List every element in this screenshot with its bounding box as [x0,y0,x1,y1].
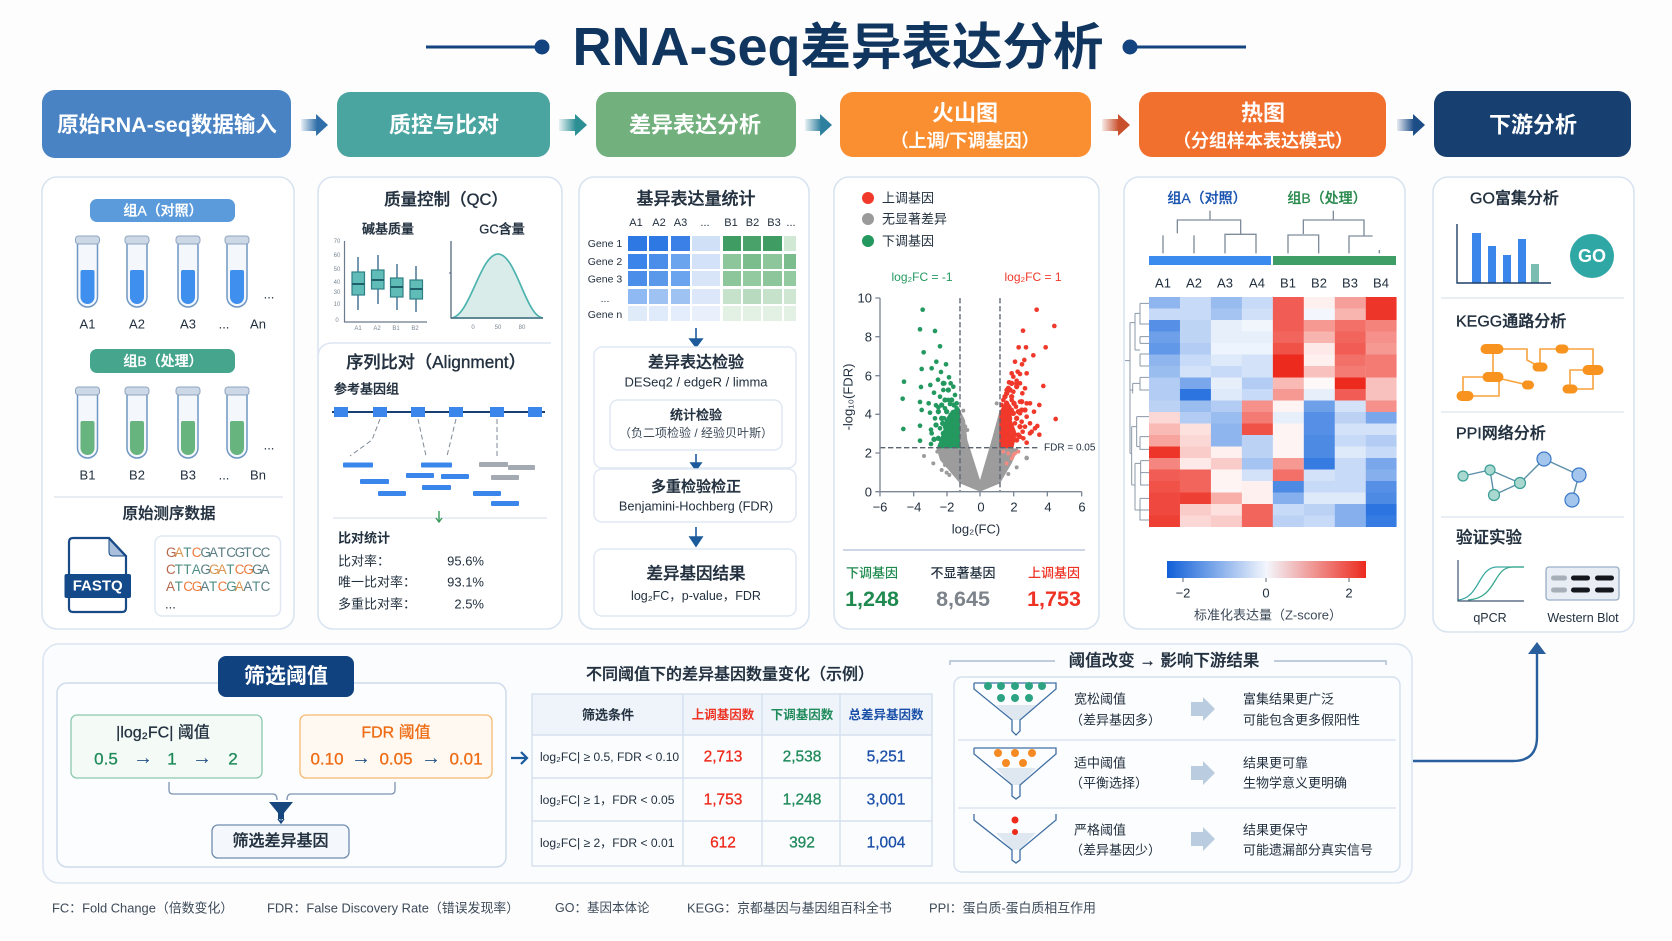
down stat: 1,248 [845,587,899,611]
column labels: A1 [1155,276,1171,290]
title: RNA-seq差异表达分析 [572,17,1104,77]
sequence reads box: ... [165,596,176,612]
arrow 5 [1397,114,1425,136]
legend: 无显著差异 [882,212,947,226]
up stat: 1,753 [1027,587,1081,611]
x axis title: log₂(FC) [952,522,1000,536]
column labels: ... [786,217,796,229]
y axis labels: 6 [865,368,872,384]
PPI network [1458,452,1586,507]
log2FC threshold box: 0.5 [94,750,118,768]
comparison table: 5,251 [867,748,905,766]
comparison table: 1,248 [783,792,821,808]
step 6 header: 下游分析 [1489,112,1577,138]
stats test box: （负二项检验 / 经验贝叶斯） [619,425,773,440]
multiple testing box [594,469,796,522]
boxplot tick labels: 50 [334,267,341,273]
comparison table: 上调基因数 [692,707,755,722]
x axis labels: 4 [1044,500,1052,514]
log2FC threshold box: → [192,747,212,769]
log2FC threshold box [71,715,262,778]
threshold badge: 筛选阈值 [244,665,328,688]
boxplot tick labels: 60 [334,253,341,259]
group A labels [80,286,274,332]
step 3 header [596,92,796,157]
KEGG pathway [1456,344,1604,401]
comparison table: log₂FC| ≥ 2，FDR < 0.01 [540,836,675,850]
boxplot tick labels: 70 [334,239,341,245]
arrow 3 [805,114,832,136]
group A labels: A2 [129,316,145,332]
row labels [588,238,622,321]
DE test box: DESeq2 / edgeR / limma [624,374,768,390]
step 2 header [337,92,550,157]
impact box [954,677,1400,872]
footer glossary [52,900,1096,916]
group A pill [90,199,235,222]
x axis labels [873,500,1086,514]
DE test box [594,347,796,468]
column labels [629,217,796,229]
alignment stats: 多重比对率： [338,596,416,612]
icon: GO badge [1570,234,1614,278]
column labels: ... [700,217,710,229]
legend: 上调基因 [882,190,934,206]
FDR threshold box [300,715,492,778]
comparison table: 1,753 [704,792,742,808]
group titles [1167,190,1367,206]
validation labels: qPCR [1473,611,1507,625]
step 5 header: 热图 [1241,100,1285,126]
colour scale [1167,561,1366,622]
medium outcome: 生物学意义更明确 [1243,776,1347,790]
panel: heatmap [1124,177,1405,629]
panel: volcano plot [834,177,1099,629]
GC curve [449,241,543,318]
footer glossary: FC：Fold Change（倍数变化） [52,900,233,916]
PPI heading: PPI网络分析 [1456,424,1546,442]
column labels: B3 [1342,276,1358,290]
step 1 header: 原始RNA-seq数据输入 [57,113,277,137]
raw data heading: 原始测序数据 [122,504,216,522]
column labels: B2 [1311,276,1327,290]
GO heading: GO富集分析 [1470,188,1559,208]
footer glossary: PPI：蛋白质-蛋白质相互作用 [929,900,1096,916]
loose text: （差异基因多） [1070,712,1161,728]
icon: GO badge: GO [1578,246,1606,266]
threshold labels: log₂FC = 1 [1004,270,1062,284]
group B labels [80,438,274,482]
column labels [1155,276,1389,290]
y axis labels: 10 [858,290,872,306]
result box: 差异基因结果 [646,564,746,583]
step 5 header: （分组样本表达模式） [1173,131,1353,151]
panel: differential expression [579,177,809,629]
KEGG heading: KEGG通路分析 [1456,312,1566,330]
result box [594,549,796,616]
step 4 header: （上调/下调基因） [890,131,1040,151]
arrow [1191,697,1215,721]
qPCR chart [1458,560,1524,601]
legend: 下调基因 [882,234,934,248]
row labels: Gene 1 [588,238,622,250]
y axis labels [858,290,872,500]
neutral stat: 不显著基因 [930,566,996,580]
medium text [1070,756,1148,790]
column labels: B4 [1373,276,1389,290]
step 4 header [840,92,1091,157]
column labels: A4 [1249,276,1265,290]
panel: threshold section [43,644,1412,883]
FDR threshold box: 0.05 [379,750,413,768]
group A labels: ... [219,316,229,332]
table title: 不同阈值下的差异基因数量变化（示例） [586,664,874,684]
FDR threshold box: FDR 阈值 [361,724,431,742]
QC heading: 质量控制（QC） [384,190,508,209]
group A tubes [76,236,249,307]
sequence reads box: ATCGATCGAATC [166,578,271,594]
loose text [1070,692,1161,728]
stats test box: 统计检验 [670,408,722,422]
boxplot tick labels: 0 [335,318,339,324]
GC tick labels: 0 [471,325,475,331]
arrow to downstream [1413,642,1546,761]
group B pill: 组B（处理） [123,353,203,369]
validation heading: 验证实验 [1456,527,1522,547]
loose outcome [1243,692,1360,728]
comparison table: 2,538 [783,748,821,766]
log2FC threshold box: → [133,747,153,769]
stats test box [610,400,782,450]
column labels: A3 [674,217,687,229]
step 4 header: 火山图 [932,100,998,126]
log2FC threshold box: 2 [228,750,238,768]
step 1 header [42,90,291,158]
row dendrogram [1125,303,1149,520]
row labels: Gene n [588,309,622,321]
GC tick labels: 80 [519,325,526,331]
step 3 header: 差异表达分析 [629,112,761,138]
loose outcome: 可能包含更多假阳性 [1243,712,1360,728]
group colour bars [1149,256,1396,265]
GC tick labels: 50 [495,325,502,331]
colour scale: 2 [1345,586,1353,600]
group B labels: B1 [80,468,95,482]
funnel medium [974,748,1056,799]
comparison table: 392 [789,834,815,852]
strict text [1070,822,1161,858]
comparison table: 3,001 [867,792,905,808]
expression matrix [628,236,796,321]
threshold inner panel [57,656,506,867]
FDR threshold box: → [351,747,371,769]
colour scale: −2 [1176,586,1190,600]
comparison table: 2,713 [704,748,742,766]
boxplot tick labels: 40 [334,280,341,286]
multiple testing box: 多重检验检正 [651,478,741,496]
row labels: ... [601,293,609,305]
legend [862,190,947,248]
x axis labels: −4 [907,500,921,514]
Western blot [1546,567,1619,600]
GC label: GC含量 [479,222,525,236]
boxplot tick labels: 10 [334,302,341,308]
y axis labels: 4 [865,406,872,422]
group A pill: 组A（对照） [123,202,203,218]
GO bar chart [1457,224,1551,283]
group B pill [90,349,235,373]
down stat: 下调基因 [846,566,898,580]
step 2 header: 质控与比对 [389,112,499,138]
threshold badge [218,656,354,697]
column labels: B1 [724,217,738,229]
panel: raw input [42,177,294,629]
filter result box: 筛选差异基因 [232,831,329,850]
loose outcome: 富集结果更广泛 [1243,692,1334,706]
log2FC threshold box: 1 [167,750,177,768]
volcano scatter [875,298,1082,496]
arrow down [691,454,701,470]
group titles: 组A（对照） [1167,190,1247,206]
strict outcome [1243,822,1373,858]
arrow down [690,328,702,347]
footer glossary: FDR：False Discovery Rate（错误发现率） [267,900,519,916]
comparison table: 总差异基因数 [848,707,924,722]
boxplot tick labels: B1 [392,326,400,332]
filter result box [212,825,349,858]
sequence reads box: GATCGATCGTCC [166,544,271,560]
neutral stat: 8,645 [936,587,990,611]
merge connector [169,782,395,823]
step 5 header [1139,92,1386,157]
y axis title: -log₁₀(FDR) [840,364,856,430]
colour scale: 标准化表达量（Z-score） [1194,608,1342,622]
arrow to table [511,752,527,764]
alignment stats [338,530,484,612]
FDR threshold box: → [421,747,441,769]
aligned reads [343,462,535,506]
alignment stats: 2.5% [454,596,484,612]
group A labels: A3 [180,316,196,332]
boxplot tick labels: B2 [411,326,419,332]
group B labels: ... [219,468,229,482]
arrow [1191,761,1215,785]
comparison table: 612 [710,834,736,852]
column labels: B1 [1280,276,1296,290]
colour scale: 0 [1262,586,1270,600]
multiple testing box: Benjamini-Hochberg (FDR) [619,498,773,514]
x axis labels: 6 [1078,500,1086,514]
group B tubes [76,387,249,458]
strict outcome: 可能遗漏部分真实信号 [1243,842,1373,858]
medium outcome: 结果更可靠 [1243,756,1308,770]
footer glossary: KEGG：京都基因与基因组百科全书 [687,900,892,916]
group A labels: An [250,316,266,332]
boxplot tick labels [334,239,419,332]
row labels: Gene 2 [588,256,622,268]
column dendrogram [1163,211,1379,253]
y axis labels: 0 [865,484,872,500]
arrow 2 [559,114,587,136]
medium text: （平衡选择） [1070,776,1148,790]
column labels: A3 [1217,276,1233,290]
panel: QC and alignment [318,177,562,629]
y axis labels: 2 [865,446,872,460]
group B labels: B2 [129,468,145,482]
group B labels: B3 [180,468,196,482]
heatmap [1149,297,1397,527]
icon: FASTQ file [64,538,131,612]
x axis labels: 0 [977,500,985,514]
comparison table: 筛选条件 [582,708,634,722]
icon: FASTQ file: FASTQ [73,578,123,594]
green down arrow [436,511,442,522]
log2FC threshold box: |log₂FC| 阈值 [116,724,210,742]
group B labels: ... [264,438,274,452]
comparison table: 1,004 [867,834,906,852]
arrow 4 [1102,114,1130,136]
alignment stats: 比对率： [338,554,390,568]
FDR threshold box: 0.01 [449,750,483,768]
group B labels: Bn [250,468,266,482]
medium text: 适中阈值 [1074,756,1126,770]
title [426,17,1246,77]
column labels: A2 [652,217,666,229]
medium outcome [1243,756,1347,790]
x axis labels: 2 [1010,500,1018,514]
boxplot [344,241,427,322]
FDR label: FDR = 0.05 [1044,442,1096,454]
up stat [1027,566,1081,611]
validation labels [1473,611,1619,625]
base quality label: 碱基质量 [362,222,414,236]
GC tick labels [471,325,526,331]
result box: log₂FC，p-value，FDR [631,589,761,603]
comparison table: 下调基因数 [771,707,834,722]
sequence reads box [155,536,280,616]
footer glossary: GO：基因本体论 [555,901,650,915]
arrow [1191,827,1215,851]
strict outcome: 结果更保守 [1243,822,1308,838]
alignment stats: 93.1% [447,574,484,590]
column labels: A2 [1186,276,1202,290]
x axis labels: −2 [940,500,954,514]
boxplot tick labels: A2 [373,326,381,332]
impact heading [950,650,1386,670]
column labels: B3 [767,217,781,229]
threshold labels: log₂FC = -1 [891,270,953,284]
group A labels: A1 [80,316,95,332]
alignment stats: 比对统计 [338,530,390,546]
alignment stats: 95.6% [447,554,484,568]
comparison table: log₂FC| ≥ 0.5, FDR < 0.10 [540,750,679,764]
impact heading: 阈值改变 → 影响下游结果 [1069,650,1260,670]
comparison table: log₂FC| ≥ 1，FDR < 0.05 [540,793,675,807]
row labels: Gene 3 [588,274,622,286]
funnel loose [974,682,1056,735]
strict text: 严格阈值 [1074,822,1126,838]
y axis labels: 8 [865,330,872,344]
panel: downstream [1433,177,1634,632]
arrow down [690,527,702,546]
step 6 header [1434,91,1631,157]
threshold labels [891,270,1062,284]
boxplot tick labels: A1 [354,326,362,332]
down stat [845,566,899,611]
column labels: A1 [629,217,643,229]
strict text: （差异基因少） [1070,842,1161,858]
x axis labels: −6 [873,500,887,514]
boxplot tick labels: 30 [334,290,341,296]
alignment heading: 序列比对（Alignment） [346,352,526,372]
reference genome track [332,407,545,456]
column labels: B2 [746,217,759,229]
group A labels: ... [264,286,274,302]
funnel strict [974,814,1056,863]
up stat: 上调基因 [1028,566,1080,580]
validation labels: Western Blot [1547,611,1619,625]
comparison table [532,694,932,866]
loose text: 宽松阈值 [1074,692,1126,706]
arrow 1 [301,114,328,136]
reference genome label: 参考基因组 [334,382,399,396]
group titles: 组B（处理） [1287,190,1367,206]
heading: 基异表达量统计 [636,190,756,208]
FDR threshold box: 0.10 [310,750,344,768]
DE test box: 差异表达检验 [648,354,744,372]
sequence reads box: CTTAGGATCGGA [166,562,270,576]
neutral stat [930,566,996,611]
alignment stats: 唯一比对率： [338,574,416,590]
